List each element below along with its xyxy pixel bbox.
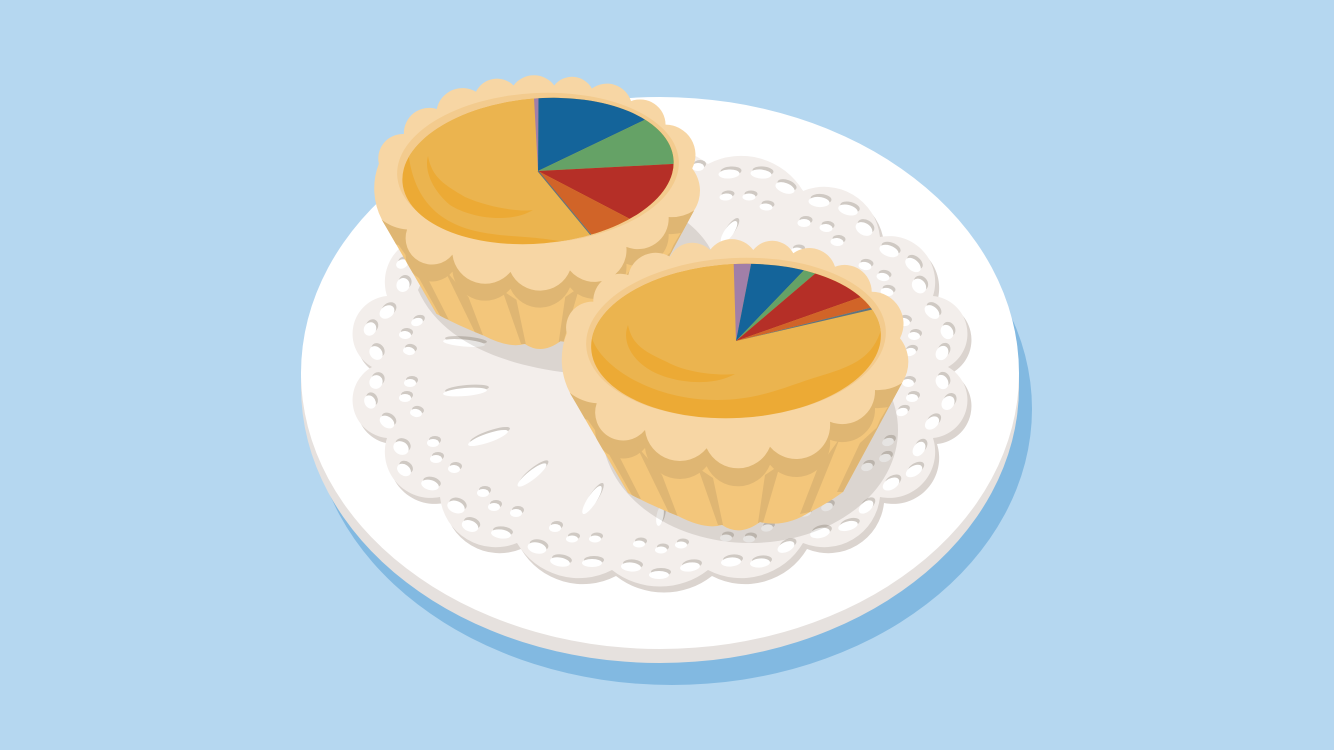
pie slice: thin grey-blue (738, 308, 872, 340)
doily shadow (357, 153, 971, 593)
pastry shell (373, 75, 702, 349)
pie slice: red (538, 164, 674, 219)
pie slice: purple (534, 98, 538, 170)
tart: right, pie chart in custard (562, 239, 908, 530)
tart shadow: left tart (418, 190, 717, 373)
lace doily (353, 147, 971, 593)
pie slice: purple (734, 264, 751, 340)
plate (301, 97, 1032, 685)
pie slice: green (538, 120, 674, 171)
pie slice: red (736, 274, 861, 341)
doily holes (361, 163, 957, 579)
plate shadow (312, 133, 1032, 685)
custard swirl (626, 325, 735, 382)
pastry shell (560, 239, 910, 530)
plate rim (301, 111, 1019, 663)
pie slice: thin grey-blue (538, 171, 591, 235)
doily hole depth (363, 160, 959, 576)
custard and pie chart surface (402, 98, 674, 244)
custard light surface (592, 264, 880, 400)
pie slice: blue (538, 98, 646, 171)
custard swirl (427, 156, 533, 218)
pie slice: blue (736, 264, 804, 341)
pie slice: orange (737, 297, 871, 341)
custard base (591, 264, 881, 418)
custard light surface (409, 98, 668, 241)
doily paper (353, 147, 967, 587)
plate top (301, 97, 1019, 649)
tart: left, pie chart in custard (374, 75, 700, 349)
tart shadow: right tart (602, 317, 898, 543)
custard base (402, 98, 674, 244)
pie slice: green (737, 270, 815, 340)
custard and pie chart surface (591, 264, 881, 418)
pie slice: orange (539, 172, 630, 234)
